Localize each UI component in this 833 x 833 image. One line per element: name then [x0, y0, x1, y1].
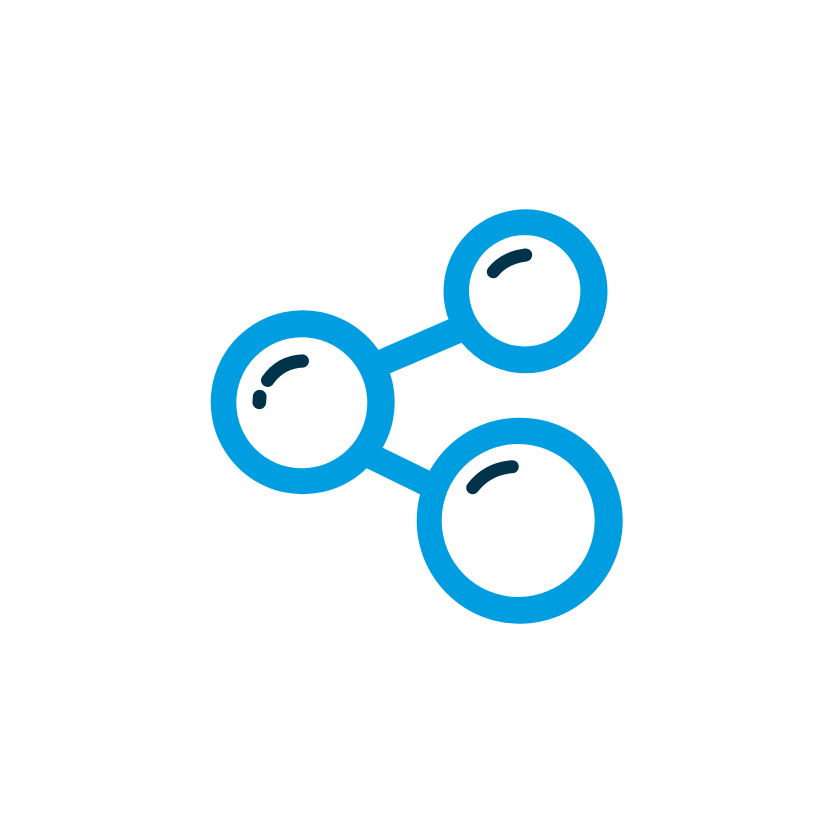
- connector: left circle to top-right circle: [370, 316, 468, 377]
- highlight: left circle dot: [252, 397, 267, 402]
- highlight: left circle arc: [268, 361, 302, 380]
- highlight: top-right circle: [493, 255, 526, 272]
- circle: bottom-right: [417, 418, 623, 624]
- circle: top-right: [444, 209, 608, 373]
- connector: left circle to bottom-right circle: [360, 444, 436, 497]
- highlight: bottom-right circle: [473, 467, 512, 488]
- circle: left: [211, 310, 395, 494]
